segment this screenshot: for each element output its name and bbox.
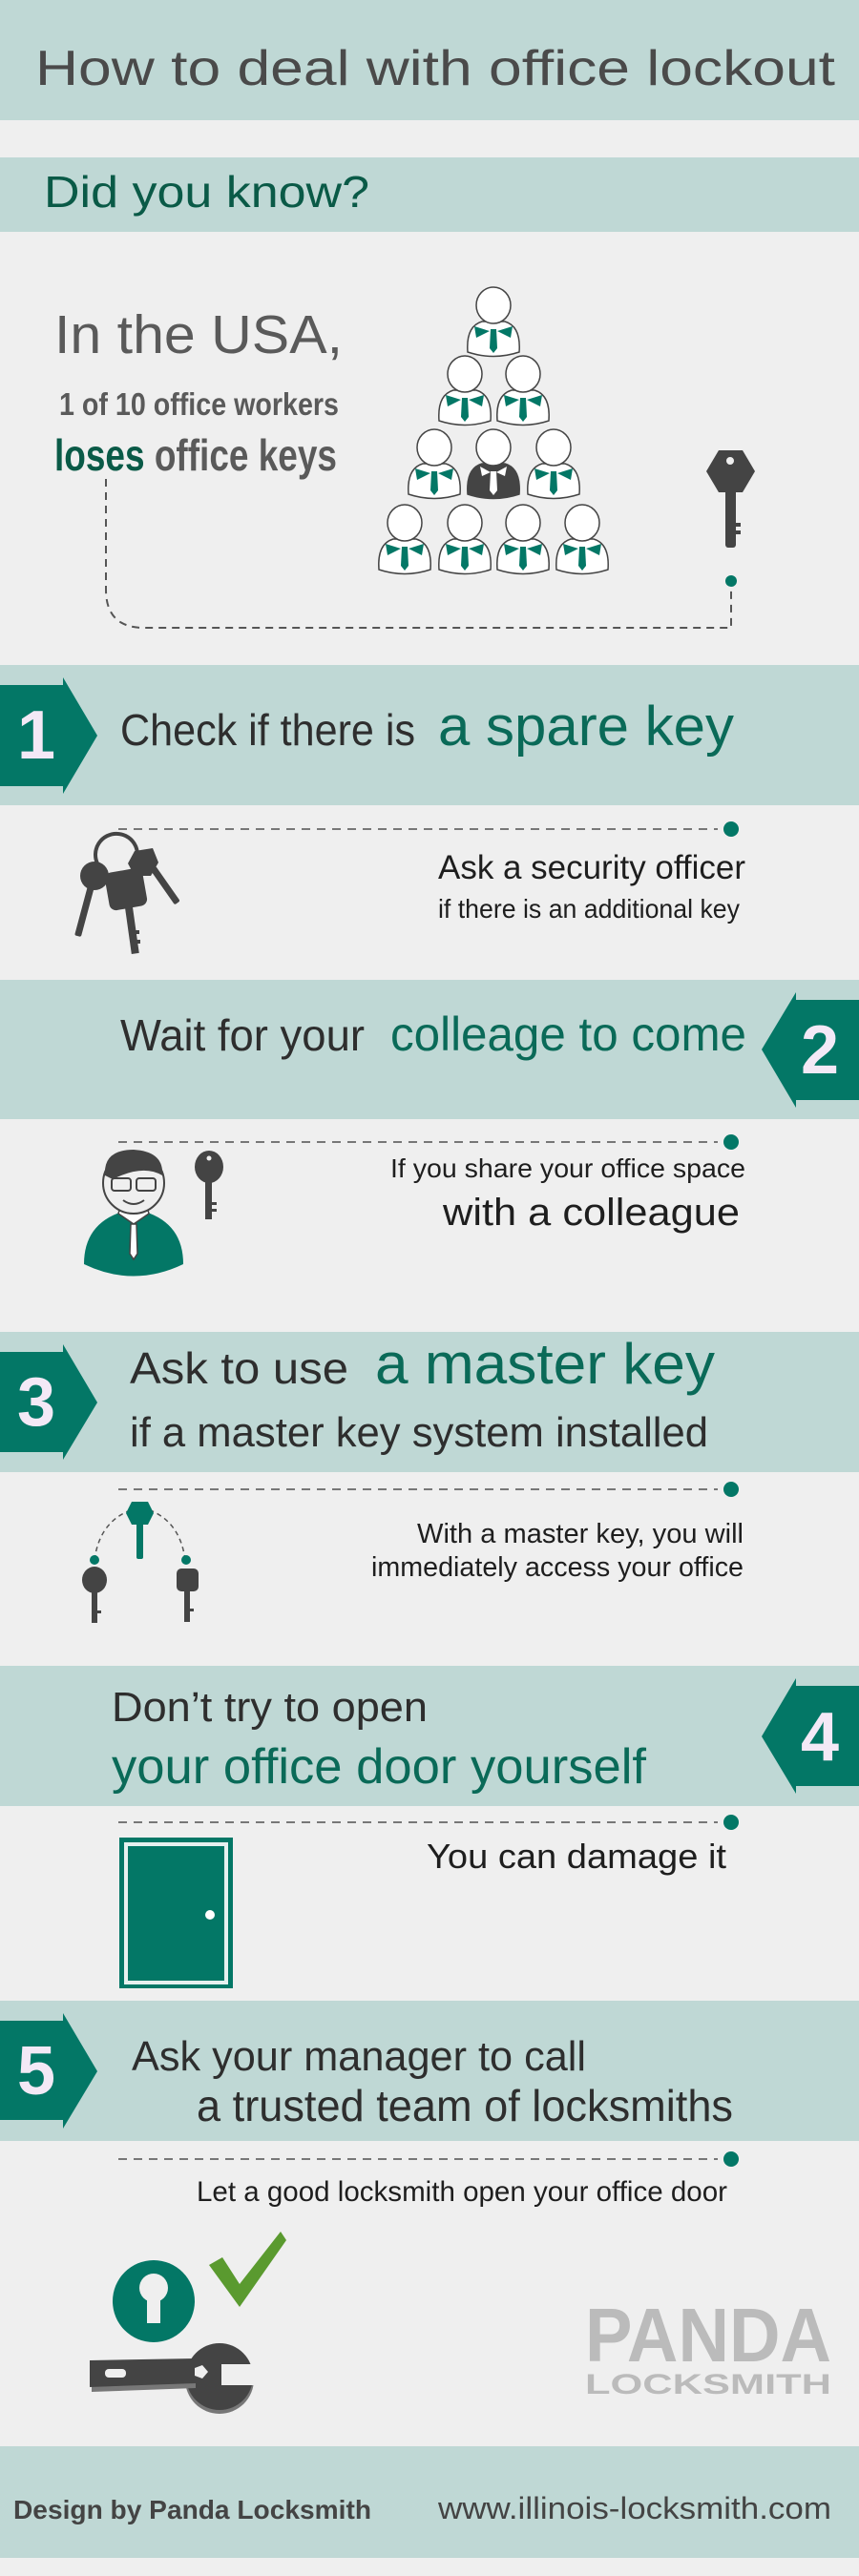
step 1 band: a spare key [438,696,734,758]
statistic text block: 1 of 10 office workers [59,386,339,422]
heading 5: Ask your manager to call [132,2033,586,2080]
badge 5 [0,2013,97,2129]
logo: panda locksmith: PANDA [585,2293,831,2378]
step 2 text: If you share your office space [390,1153,745,1183]
step 2 band: colleage to come [390,1008,746,1061]
statistic text block [54,304,343,480]
icon: master key [82,1502,199,1623]
divider 2 [118,1134,739,1150]
step 2 text [390,1153,745,1234]
step 2 band [0,980,859,1119]
heading 2: Wait for your [120,1010,365,1060]
badge 3: 3 [17,1364,55,1441]
icon: keyhole [113,2260,195,2342]
step 3 text: With a master key, you will [417,1519,744,1549]
footer band [0,2446,859,2558]
badge 2: 2 [801,1012,839,1089]
logo: panda locksmith: LOCKSMITH [585,2369,831,2400]
title band [0,0,859,120]
step 1 text [438,849,745,924]
step 3 band: a master key [375,1332,715,1396]
statistic text block: loses office keys [54,430,337,480]
badge 1 [0,677,97,794]
dashed connector [106,479,737,628]
badge 5: 5 [17,2033,55,2109]
heading: did you know: Did you know? [44,167,369,217]
badge 2 [762,992,859,1108]
step 3 text: immediately access your office [371,1552,744,1583]
badge 1: 1 [17,697,55,774]
step 3 text [371,1519,744,1583]
footer url: www.illinois-locksmith.com [437,2491,831,2525]
icon: lost key [706,450,755,548]
step 5 text: Let a good locksmith open your office door [197,2176,727,2208]
step 3 band [0,1332,859,1472]
divider 5 [118,2151,739,2167]
step 5 band: a trusted team of locksmiths [197,2081,733,2130]
statistic text block: In the USA, [54,304,343,365]
step 4 text: You can damage it [427,1837,726,1876]
badge 4: 4 [801,1699,839,1776]
badge 3 [0,1344,97,1460]
step 1 text: Ask a security officer [438,849,745,886]
icon: checkmark [209,2232,286,2307]
people pyramid [379,287,608,574]
step 2 text: with a colleague [442,1192,740,1234]
badge 4 [762,1678,859,1794]
footer credit: Design by Panda Locksmith [13,2495,371,2524]
step 4 band: your office door yourself [112,1739,647,1795]
did you know band [0,157,859,232]
step 1 band [0,665,859,805]
heading 4: Don’t try to open [112,1684,428,1731]
icon: colleague with key [84,1150,223,1277]
divider 4 [118,1815,739,1830]
title: How to deal with office lockout [35,41,836,96]
step 5 band [0,2001,859,2141]
divider 3 [118,1482,739,1497]
icon: door [119,1838,233,1988]
divider 1 [118,821,739,837]
step 4 band [0,1666,859,1806]
heading 3: Ask to use [130,1343,348,1393]
step 1 text: if there is an additional key [438,894,740,924]
icon: key bunch [74,834,180,954]
icon: wrench [90,2343,254,2414]
heading 1: Check if there is [120,705,415,755]
step 3 band: if a master key system installed [130,1409,708,1456]
